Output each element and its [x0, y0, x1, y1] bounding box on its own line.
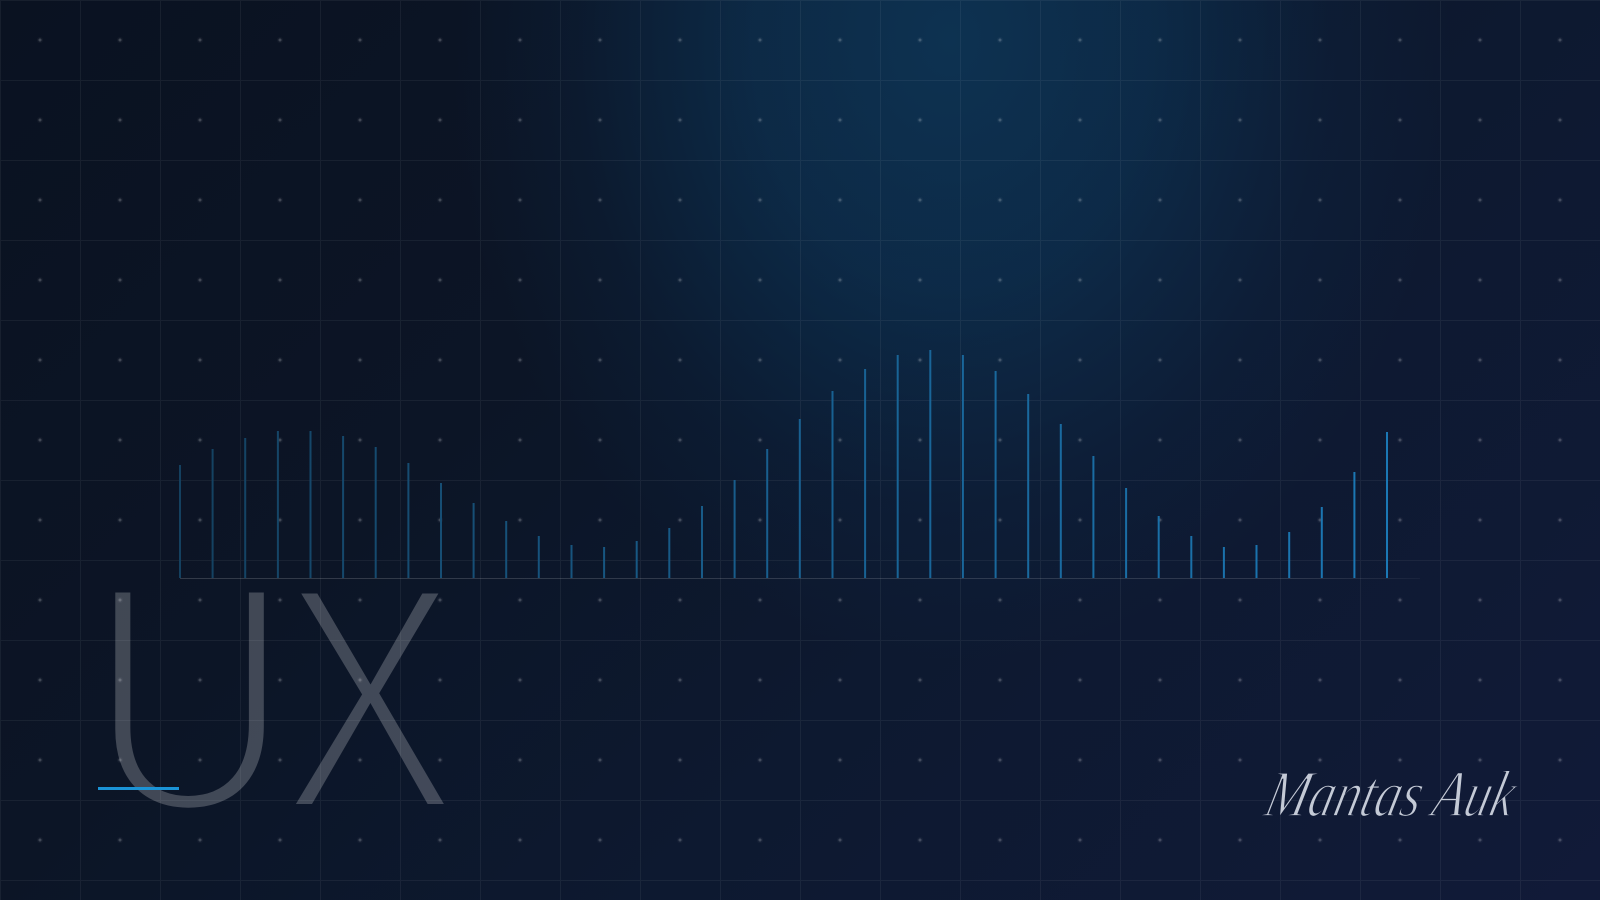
title: UX [115, 592, 444, 808]
signature: Mantas Auk: Mantas Auk [1258, 757, 1526, 830]
chart: vertical bars [180, 350, 1420, 579]
title: UX: X [281, 518, 458, 878]
title: UX: U [88, 515, 291, 881]
chart axis baseline [180, 578, 1420, 579]
accent underline [98, 787, 179, 790]
